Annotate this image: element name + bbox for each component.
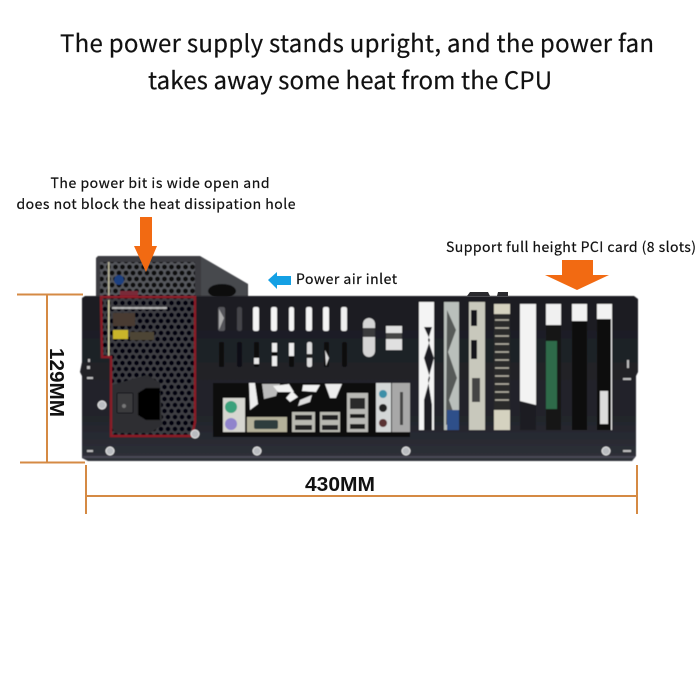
rear IO window [213, 383, 410, 437]
bracket top tabs [467, 292, 508, 296]
rocker switch [117, 393, 133, 413]
arrow: orange down to PSU [134, 217, 157, 272]
dimension: width 430MM: 430MM [305, 474, 375, 496]
PCI slots [419, 302, 612, 430]
power socket area with red outline [101, 297, 195, 436]
serial port [247, 417, 287, 432]
top vent slots [218, 307, 347, 331]
label: power air inlet: Power air inlet [296, 269, 398, 289]
IEC socket [138, 388, 160, 420]
title [60, 24, 654, 96]
lower vent slots [219, 318, 402, 367]
callout: power bit open [16, 173, 296, 214]
power supply unit [96, 256, 248, 298]
title: takes away some heat from the CPU [148, 61, 552, 96]
dimension: height 129MM [17, 294, 85, 462]
AC inlet [112, 375, 162, 433]
dimension: width 430MM [86, 465, 637, 514]
title: The power supply stands upright, and the power fan [60, 24, 654, 59]
PS/2 ports [223, 398, 245, 432]
LAN and USB [347, 393, 368, 432]
dimension: height 129MM: 129MM [45, 348, 67, 417]
arrow: blue air inlet [268, 272, 291, 289]
label: PCI card support: Support full height PCI card (8 slots) [446, 237, 696, 257]
side bracket details [87, 359, 631, 452]
callout: power bit open: The power bit is wide open and [50, 173, 270, 193]
callout: power bit open: does not block the heat dissipation hole [16, 194, 296, 214]
chassis rear panel [80, 296, 638, 461]
screws [98, 401, 610, 455]
arrow: orange down to PCI slots [545, 260, 609, 290]
audio jacks [376, 383, 391, 432]
USB ports [292, 412, 315, 432]
